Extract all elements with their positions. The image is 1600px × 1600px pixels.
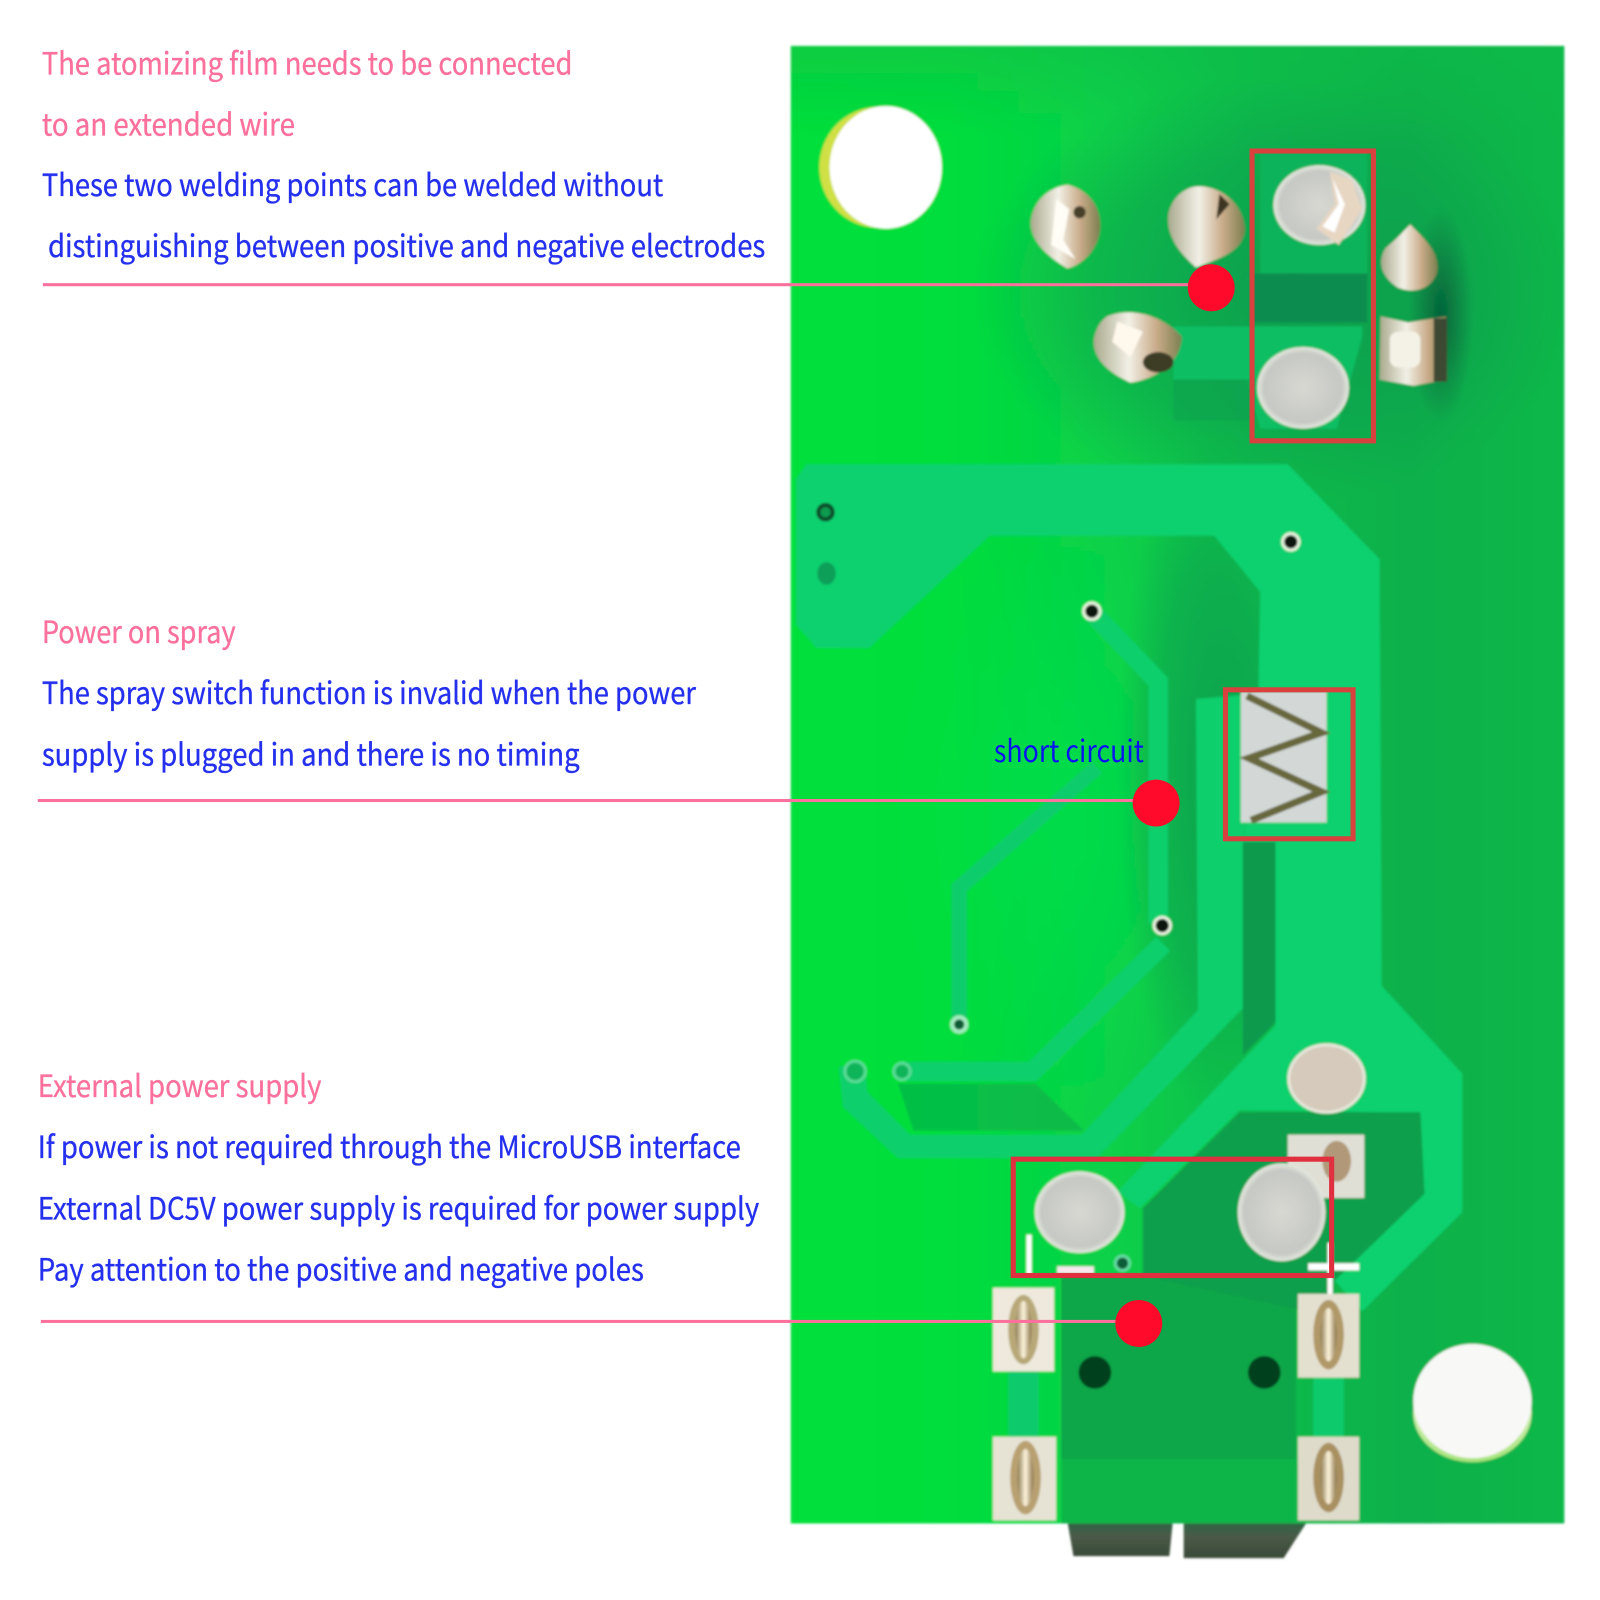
callout 3 text: Pay attention to the positive and negative poles [38, 1245, 644, 1290]
callout 2 text: supply is plugged in and there is no timing [42, 729, 580, 774]
dark gap beside main trace [1243, 842, 1276, 1055]
copper trace: thin signal [959, 767, 1097, 1026]
connector metal tabs [1066, 1515, 1311, 1558]
callout 1 text: to an extended wire [42, 100, 295, 145]
callout 3 text: External DC5V power supply is required for power supply [38, 1183, 759, 1228]
USB connector solder tabs [993, 1288, 1359, 1520]
mounting hole: bottom right [1413, 1344, 1532, 1462]
lower pads [1035, 1045, 1364, 1270]
callout 3 leader line and dot [41, 1300, 1162, 1347]
callout 3 text: External power supply [38, 1061, 321, 1106]
highlight frame: external power pads [1013, 1159, 1332, 1276]
via holes [1084, 534, 1299, 934]
highlight frame: short circuit pad [1226, 690, 1353, 839]
callout 2 text: The spray switch function is invalid when the power [42, 668, 696, 713]
via outlines on left [817, 505, 966, 1082]
copper trace: main power plane [796, 464, 1462, 1311]
connector mounting holes [1079, 1356, 1281, 1389]
callout 3 text [38, 1061, 759, 1290]
label: short circuit: short circuit [994, 726, 1144, 771]
copper trace: via link [1092, 612, 1158, 923]
callout 1 leader line and dot [43, 264, 1235, 311]
mounting hole: top left [819, 106, 942, 229]
callout 2 leader line and dot [38, 780, 1180, 827]
solder joints: top row [1031, 185, 1447, 386]
board shading [791, 46, 1582, 1469]
dark solder mask regions [1143, 153, 1424, 1316]
copper trace: lower band [839, 694, 1257, 1158]
callout 1 text [42, 38, 765, 266]
board substrate [791, 46, 1564, 1523]
panel: circuit board photo [791, 46, 1582, 1558]
white silkscreen marks [1027, 1235, 1359, 1299]
highlight frame: atomizing film pads [1252, 151, 1373, 441]
callout 1 text: These two welding points can be welded without [42, 160, 664, 205]
short circuit solder pad with zigzag wire [1241, 692, 1327, 822]
callout 2 text [42, 607, 696, 774]
copper trace: inner signal [903, 944, 1163, 1071]
callout 2 text: Power on spray [42, 607, 236, 652]
solder pads in upper frame [1257, 165, 1365, 429]
connector shell on board [1061, 1459, 1296, 1523]
callout 1 text: distinguishing between positive and negative electrodes [48, 221, 765, 266]
callout 1 text: The atomizing film needs to be connected [42, 38, 572, 83]
callout 3 text: If power is not required through the MicroUSB interface [38, 1122, 741, 1167]
